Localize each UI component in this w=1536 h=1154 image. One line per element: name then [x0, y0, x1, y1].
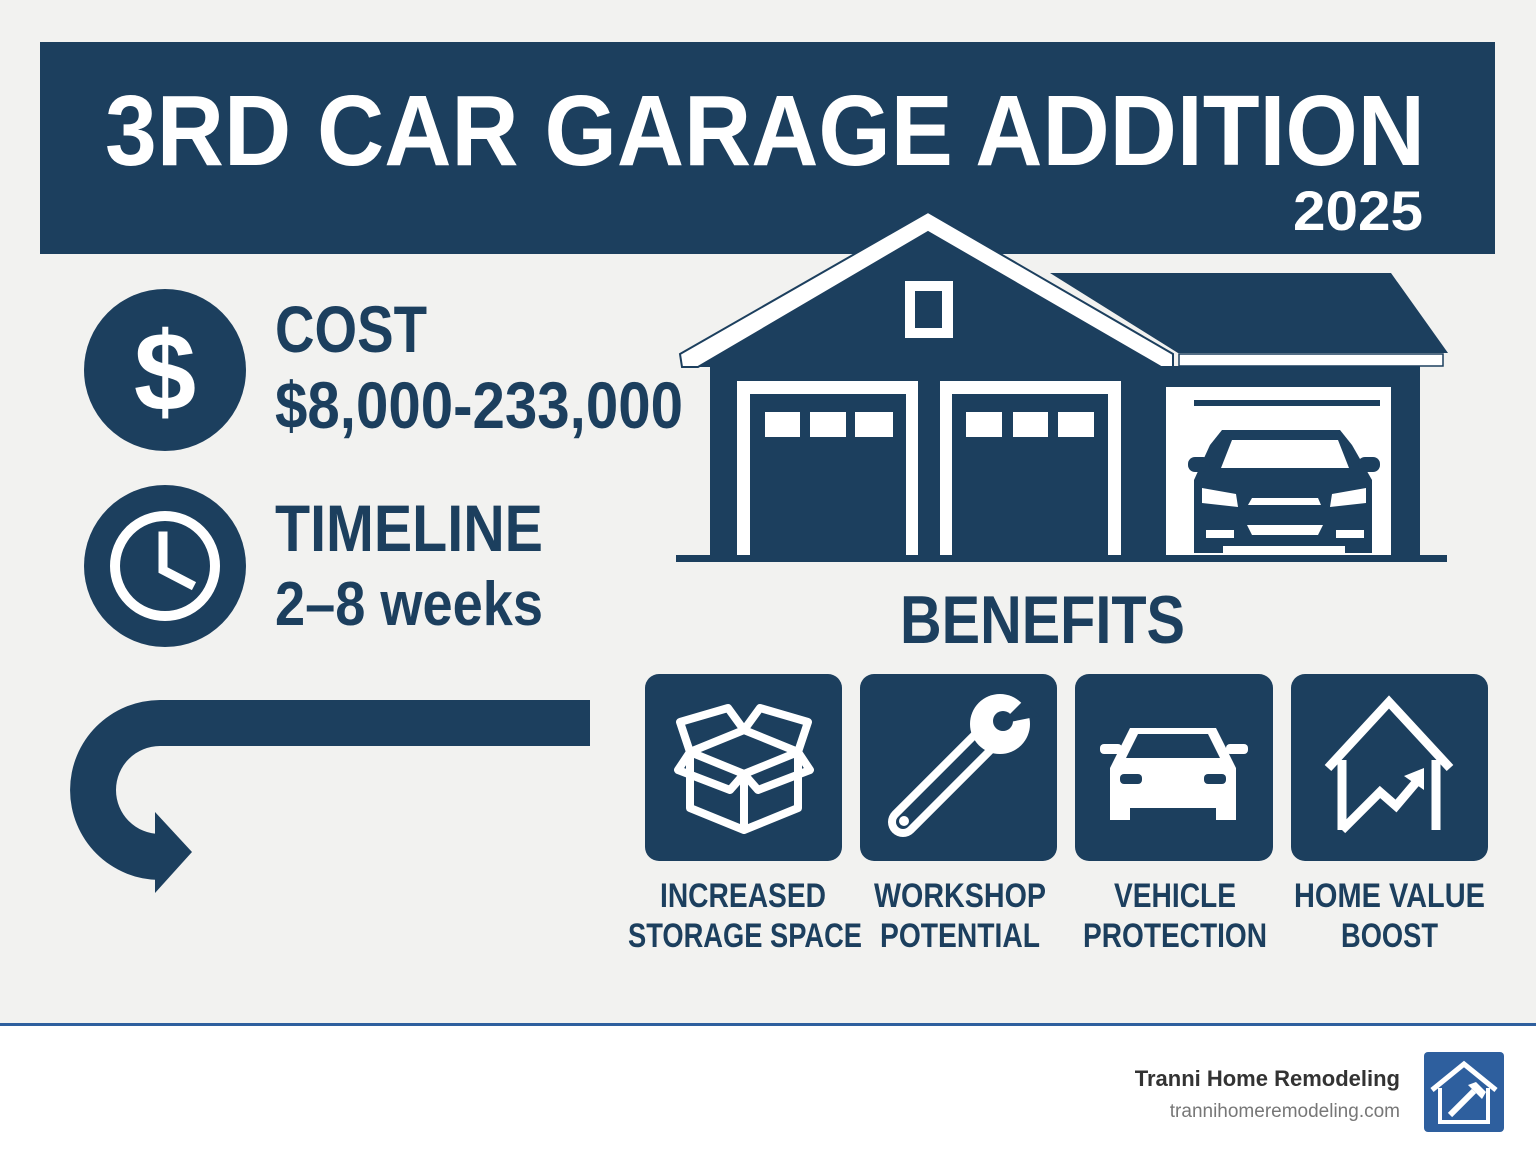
footer: Tranni Home Remodeling — [1135, 1066, 1400, 1091]
benefit: workshop: WORKSHOP — [874, 877, 1046, 915]
icon: dollar circle — [84, 289, 246, 451]
arrow — [70, 700, 590, 893]
text: timeline: TIMELINE — [275, 491, 543, 565]
footer: trannihomeremodeling.com — [1170, 1101, 1400, 1122]
title banner: 2025 — [1293, 179, 1423, 242]
text: cost: $8,000-233,000 — [275, 368, 683, 442]
benefit: vehicle: PROTECTION — [1083, 917, 1267, 955]
title banner: 3RD CAR GARAGE ADDITION — [105, 75, 1425, 187]
text: timeline — [275, 491, 543, 639]
benefit: workshop: POTENTIAL — [880, 917, 1040, 955]
benefit: vehicle: VEHICLE — [1114, 877, 1236, 915]
benefit: vehicle — [1075, 674, 1273, 955]
footer — [0, 1023, 1536, 1154]
heading: benefits: BENEFITS — [900, 582, 1185, 658]
text: cost: COST — [275, 292, 427, 366]
text: cost — [275, 292, 683, 442]
text: timeline: 2–8 weeks — [275, 570, 543, 639]
benefit: home value: HOME VALUE — [1294, 877, 1485, 915]
benefit: storage — [628, 674, 862, 955]
benefit: storage: INCREASED — [660, 877, 826, 915]
title banner — [40, 42, 1495, 254]
icon: logo — [1424, 1052, 1504, 1132]
benefit: home value: BOOST — [1341, 917, 1438, 955]
icon: dollar circle: $ — [134, 309, 196, 434]
garage illustration — [676, 212, 1448, 562]
benefit: workshop — [860, 674, 1057, 955]
benefit: home value — [1291, 674, 1488, 955]
icon: clock circle — [84, 485, 246, 647]
benefit: storage: STORAGE SPACE — [628, 917, 862, 955]
